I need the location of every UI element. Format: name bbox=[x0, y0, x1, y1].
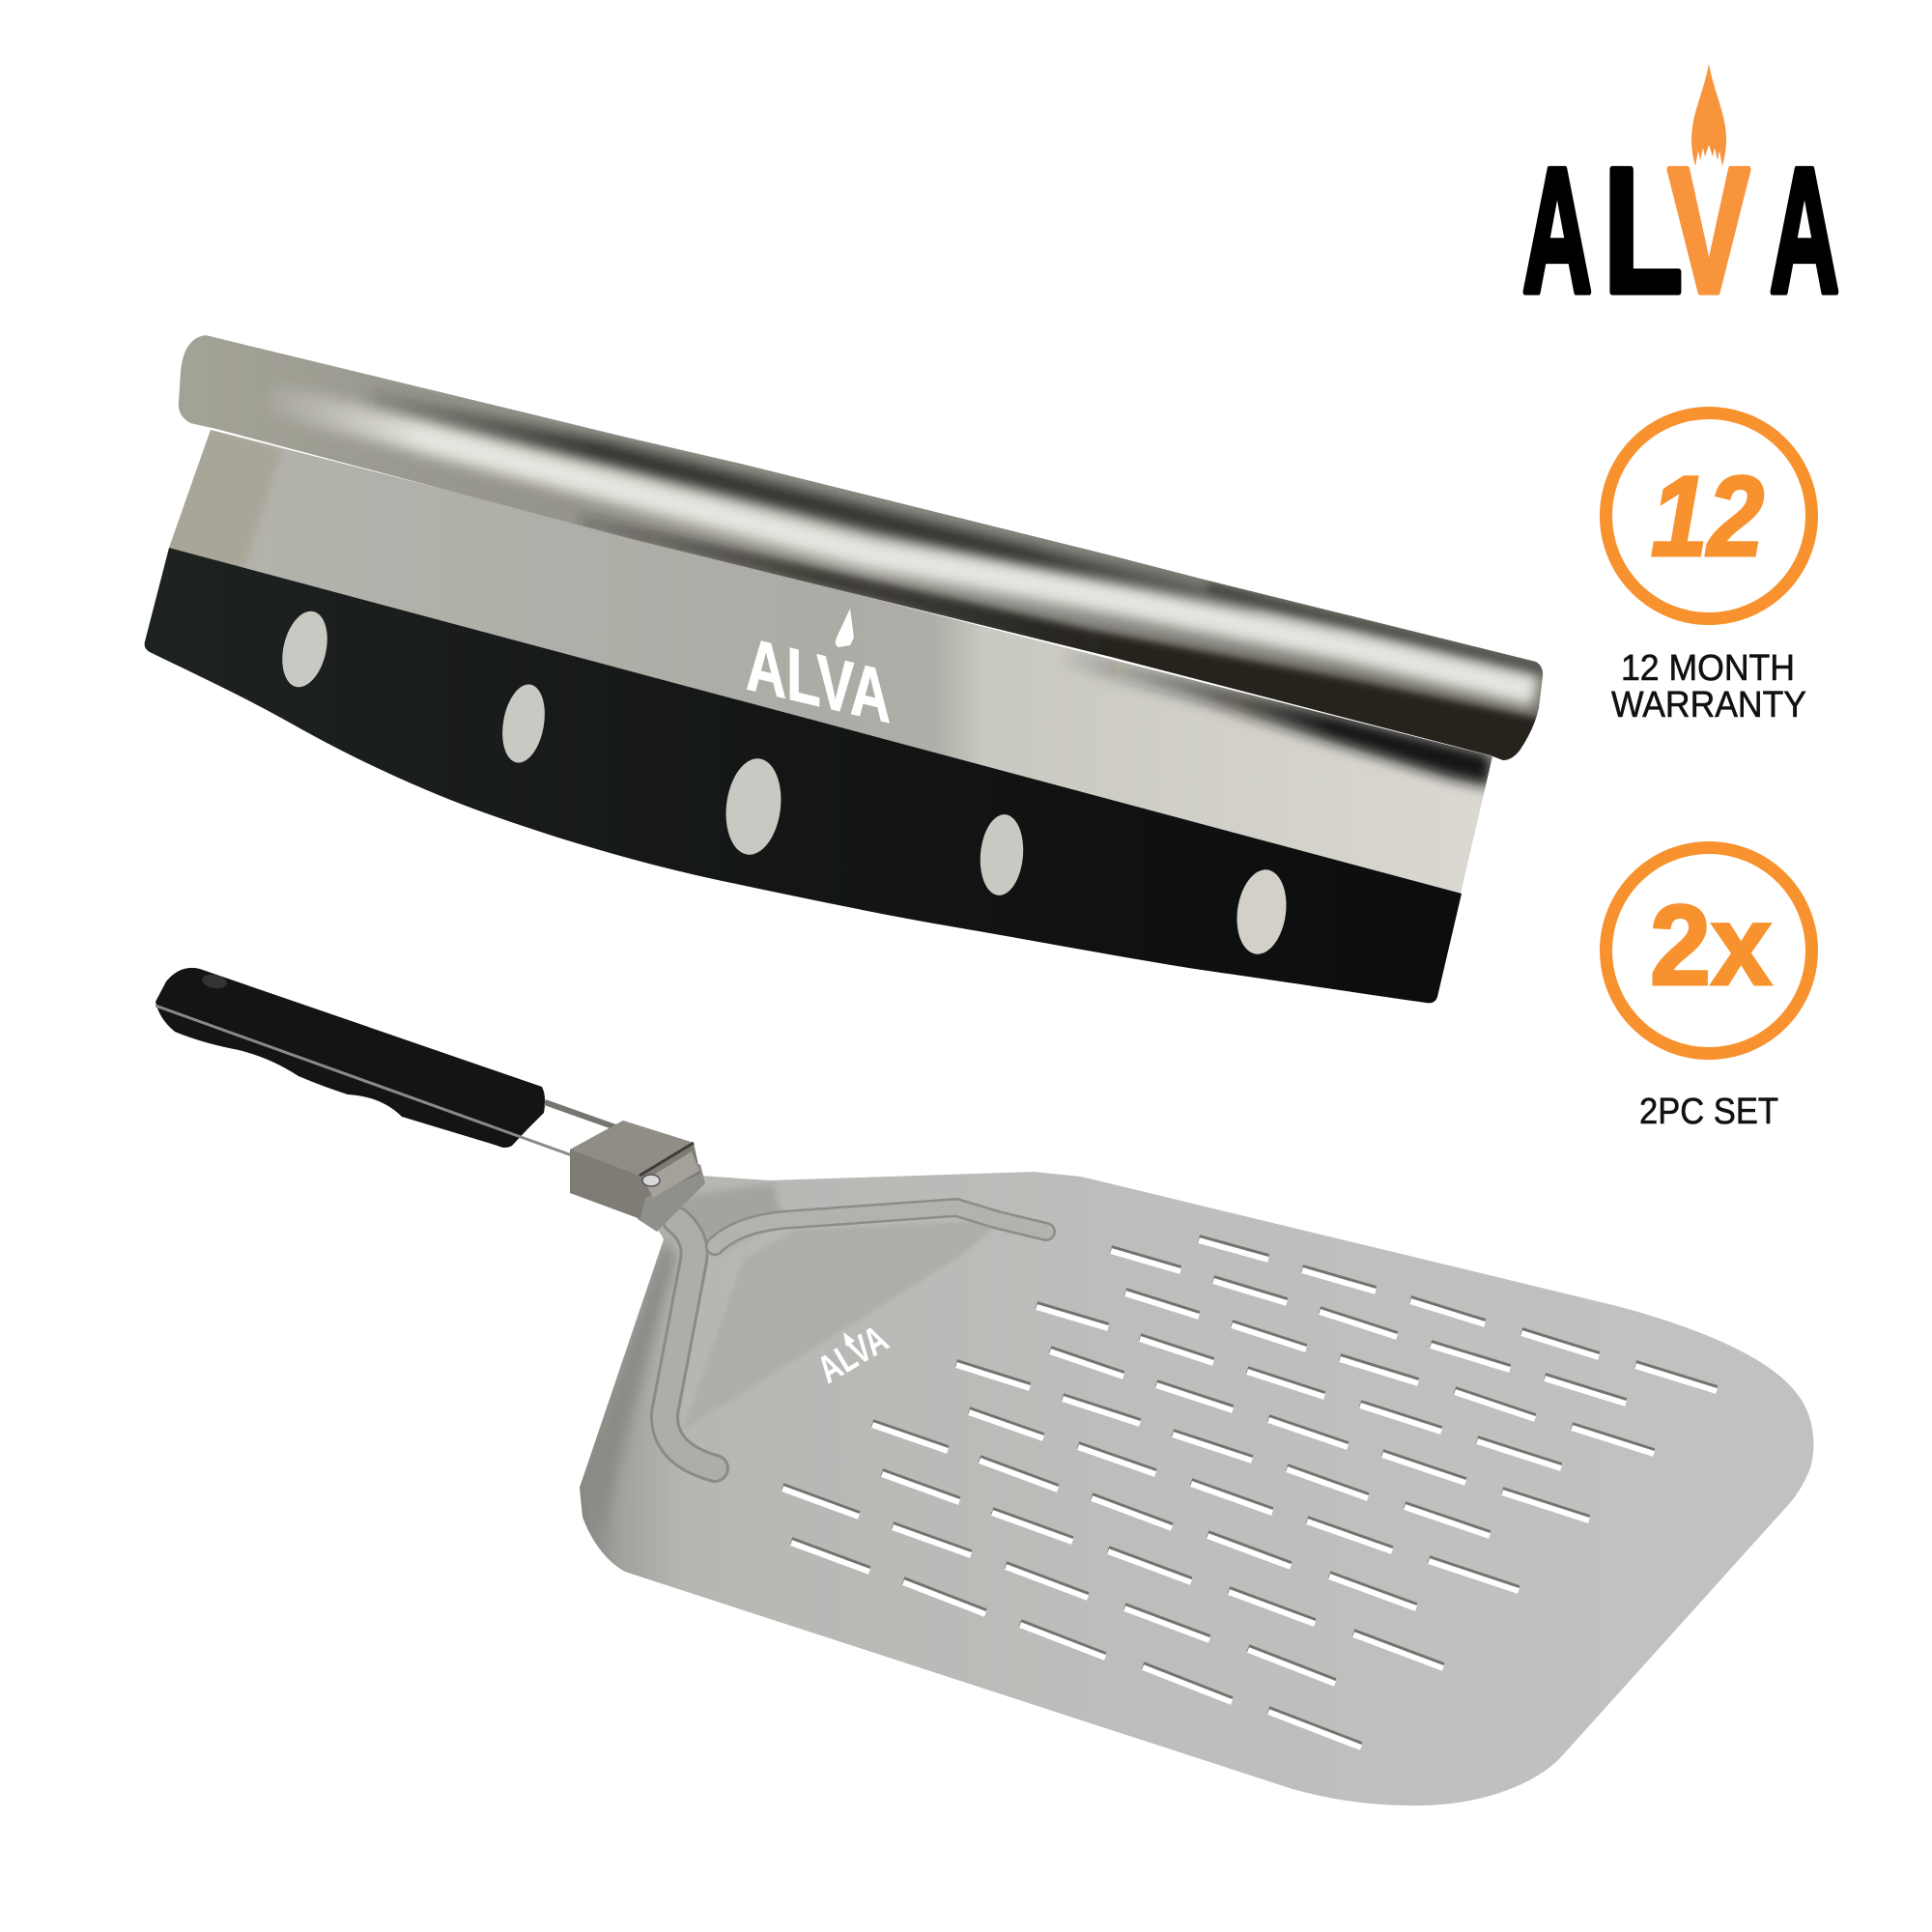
peel neck shading bbox=[580, 1183, 991, 1509]
product: pizza rocker cutter bbox=[145, 319, 1565, 1003]
logo wordmark bbox=[1522, 130, 1839, 329]
blade logo: ALVA bbox=[746, 621, 891, 739]
warranty caption: WARRANTY bbox=[1611, 685, 1806, 725]
peel Y rib bbox=[665, 1208, 1046, 1468]
infographic canvas bbox=[145, 64, 1839, 1806]
peel logo bbox=[810, 1318, 895, 1392]
folding black handle bbox=[156, 968, 572, 1155]
icon: logo flame bbox=[1691, 64, 1726, 166]
logo wordmark: V bbox=[1668, 130, 1749, 329]
set ring bbox=[1605, 848, 1812, 1053]
badge: 12 month warranty bbox=[1605, 413, 1812, 725]
warranty ring bbox=[1605, 413, 1812, 618]
brand logo bbox=[1522, 64, 1839, 329]
cutter black guard bbox=[145, 548, 1462, 1003]
guard holes bbox=[275, 607, 1292, 957]
badge: 2pc set bbox=[1605, 848, 1812, 1132]
logo wordmark: A bbox=[1770, 130, 1839, 329]
logo wordmark: L bbox=[1604, 130, 1683, 329]
logo wordmark: A bbox=[1522, 130, 1592, 329]
cutter steel blade bbox=[164, 425, 1492, 894]
peel logo: ALVA bbox=[810, 1318, 895, 1392]
handle metal strip bbox=[156, 1006, 572, 1155]
blade logo bbox=[746, 609, 891, 739]
product: folding pizza peel bbox=[156, 968, 1813, 1805]
warranty caption bbox=[1611, 648, 1806, 725]
set caption: 2PC SET bbox=[1639, 1092, 1778, 1132]
peel perforation slots bbox=[782, 1238, 1717, 1747]
warranty caption: 12 MONTH bbox=[1621, 648, 1795, 689]
warranty number: 12 bbox=[1651, 453, 1764, 581]
steel hinge bracket bbox=[570, 1121, 705, 1232]
cutter rolled handle bbox=[178, 335, 1544, 760]
handle hanging hole bbox=[201, 973, 228, 990]
peel blade bbox=[580, 1172, 1813, 1805]
set number: 2x bbox=[1650, 882, 1772, 1009]
handle rods bbox=[545, 1102, 618, 1128]
